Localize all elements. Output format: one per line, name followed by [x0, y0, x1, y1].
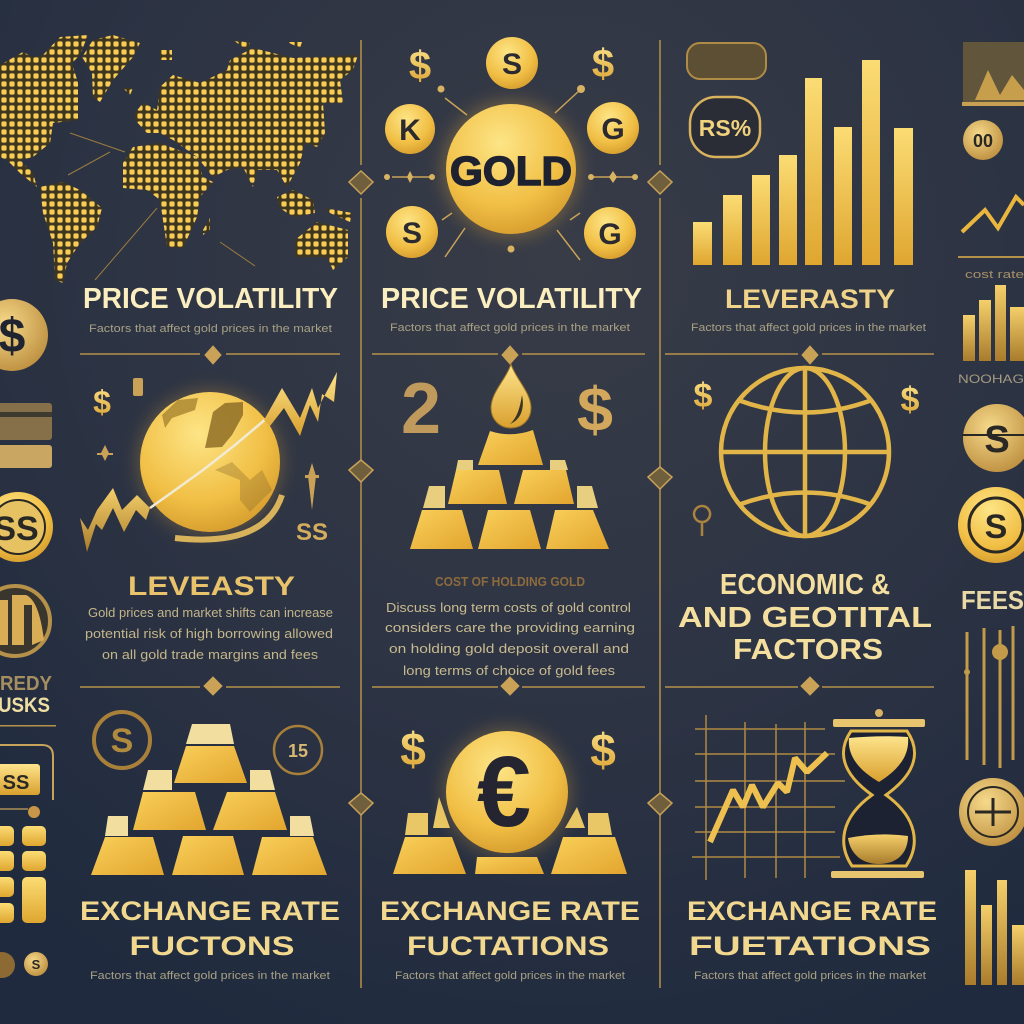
icon: gold coin: GOLD: [450, 148, 572, 194]
faded heading: COST OF HOLDING GOLD: [435, 574, 585, 589]
numeral two: 2: [401, 369, 441, 449]
body text: potential risk of high borrowing allowed: [85, 626, 333, 641]
panel: exchange rate euro coin: [380, 723, 640, 982]
heading: exchange rate: EXCHANGE RATE: [380, 896, 640, 926]
zigzag right: [264, 372, 337, 436]
coin split: [962, 404, 1024, 472]
panel: left edge column: [0, 299, 56, 978]
calculator: SS: [3, 772, 29, 794]
gold bars: [393, 797, 627, 874]
bottom coins: S: [32, 957, 41, 972]
bar chart: [693, 60, 913, 265]
label SS: SS: [296, 519, 328, 546]
coin: [963, 120, 1003, 160]
heading: exchange rate: EXCHANGE RATE: [80, 896, 340, 926]
panel: leverage bar chart: [687, 43, 926, 334]
heading: price volatility 2: PRICE VOLATILITY: [381, 283, 642, 315]
bars: [963, 285, 1024, 361]
heading: exchange rate: [380, 896, 640, 961]
coin rings: [958, 487, 1024, 563]
coin labels: [111, 722, 308, 761]
gold bars: [91, 724, 327, 875]
coin split: S: [984, 419, 1010, 461]
body text: Gold prices and market shifts can increase: [88, 605, 333, 620]
calculator: [0, 745, 53, 923]
heading: leverage: LEVERASTY: [725, 284, 895, 314]
heading: exchange rate: FUCTONS: [130, 931, 294, 961]
sliders: [964, 626, 1013, 768]
glow: [443, 728, 571, 856]
body text: on holding gold deposit overall and: [389, 641, 629, 656]
icon: oil drop: [491, 364, 531, 428]
chart trend line: [710, 753, 827, 842]
dollar signs: $: [590, 724, 616, 776]
body text: [85, 605, 333, 662]
body text: [385, 600, 635, 678]
connectors: [392, 90, 635, 260]
dollar sign: $: [577, 376, 613, 445]
caption: Factors that affect gold prices in the market: [694, 970, 926, 982]
arc under globe: [175, 495, 282, 540]
caption: Factors that affect gold prices in the market: [390, 322, 630, 334]
body text: on all gold trade margins and fees: [102, 647, 319, 662]
panel: gold coin price volatility: [381, 37, 642, 334]
credit risks label: REDY: [0, 673, 53, 695]
glow: [138, 390, 282, 534]
coin outlines: [94, 712, 322, 774]
heading: economic factors: FACTORS: [733, 634, 883, 666]
credit cards: [0, 403, 52, 468]
heading: economic factors: AND GEOTITAL: [678, 602, 932, 634]
zigzag left: [80, 488, 150, 552]
coin letters: G: [601, 113, 625, 146]
dollar signs: $: [409, 44, 431, 88]
body text: long terms of choice of gold fees: [403, 663, 616, 678]
dollar sign: $: [93, 384, 111, 420]
panel dividers: [80, 40, 934, 988]
icon: rate badge: [690, 97, 760, 157]
coin labels: S: [111, 722, 133, 760]
dollar signs: [694, 377, 920, 419]
small figure icon: [694, 506, 710, 536]
coin letters: G: [598, 218, 622, 251]
panel: world map price volatility: [0, 35, 358, 335]
panel: exchange rate chart and hourglass: [687, 709, 937, 982]
heading: exchange rate: FUCTATIONS: [407, 931, 609, 961]
heading: economic factors: [678, 569, 932, 666]
sparkle icons: [97, 378, 319, 510]
caption: Factors that affect gold prices in the market: [691, 322, 926, 334]
dollar signs: $: [694, 377, 713, 415]
credit risks label: [0, 673, 53, 717]
map connector lines: [68, 133, 255, 280]
glow: [443, 101, 579, 237]
panel: gold bars pyramid: [385, 364, 635, 678]
bottom coins: [0, 952, 48, 978]
icon: gold coin: [446, 104, 576, 234]
rule: [0, 725, 56, 726]
icon: hourglass: [831, 709, 925, 878]
building coin: [0, 586, 50, 656]
icon: wire globe: [721, 368, 889, 536]
coin plus: [959, 778, 1024, 846]
panel: exchange rate bars: [80, 712, 340, 982]
icon: euro coin: €: [477, 736, 531, 848]
dollar signs: $: [901, 381, 920, 419]
caption: Factors that affect gold prices in the market: [395, 970, 625, 982]
rule: [958, 256, 1024, 258]
coin letters: S: [402, 217, 422, 250]
panel: right edge column: [958, 42, 1024, 985]
heading: exchange rate: [687, 896, 937, 961]
icon: globe with zigzag: [140, 392, 280, 532]
SS coin: [0, 492, 53, 562]
icon: euro coin: [446, 731, 568, 853]
heading: economic factors: ECONOMIC &: [720, 569, 890, 601]
panel: leverage globe: [80, 372, 337, 662]
dollar signs: [400, 723, 616, 776]
heading: leverage: LEVEASTY: [128, 571, 295, 601]
coin letters: K: [399, 114, 421, 147]
panel: economic and geopolitical factors: [678, 368, 932, 666]
world map: [0, 35, 358, 283]
coin letters: S: [502, 48, 522, 81]
heading: exchange rate: FUETATIONS: [689, 931, 931, 961]
body text: Discuss long term costs of gold control: [386, 600, 631, 615]
coin rings: S: [985, 508, 1007, 546]
divider ornaments: [204, 171, 819, 815]
small label: cost rate: [965, 269, 1024, 281]
dollar signs: $: [592, 42, 614, 86]
line chart grid: [692, 715, 845, 880]
heading: price volatility: PRICE VOLATILITY: [83, 283, 338, 315]
heading: exchange rate: [80, 896, 340, 961]
bottom bars: [965, 870, 1024, 985]
icon: rate badge: RS%: [699, 115, 751, 141]
coin: 00: [973, 131, 993, 151]
badge: [687, 43, 766, 79]
caption: Factors that affect gold prices in the market: [90, 970, 330, 982]
gold bars: [410, 430, 609, 549]
caption: Factors that affect gold prices in the market: [89, 323, 332, 335]
dollar coin: [0, 299, 48, 371]
heading: exchange rate: EXCHANGE RATE: [687, 896, 937, 926]
dollar signs: [409, 42, 614, 88]
currency coins: [385, 37, 639, 259]
coin labels: 15: [288, 741, 308, 761]
image tile: [962, 42, 1024, 106]
body text: considers care the providing earning: [385, 620, 635, 635]
trend icon: [962, 197, 1024, 232]
connector dots: [384, 85, 638, 252]
coin letters: [399, 48, 625, 251]
small label: NOOHAG: [958, 372, 1024, 386]
dollar signs: $: [400, 723, 426, 775]
